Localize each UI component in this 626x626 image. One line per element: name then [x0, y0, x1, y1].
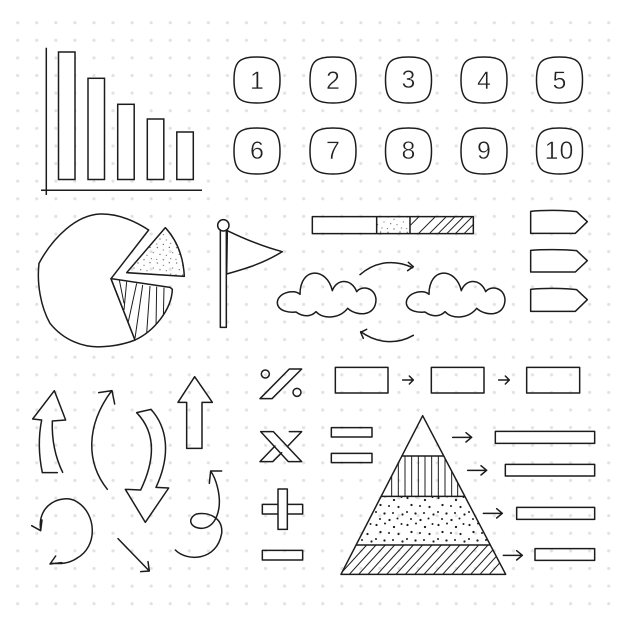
pyramid labels	[453, 431, 595, 560]
arrow: looped	[175, 471, 222, 557]
badge 9: 9	[477, 137, 491, 165]
pie dotted slice	[127, 228, 184, 276]
bottom arrow	[361, 329, 413, 342]
tag 1	[531, 210, 587, 233]
hand-drawn arrows	[32, 377, 222, 572]
pie main slice	[38, 214, 149, 347]
badge 4	[461, 57, 507, 103]
progress bar	[312, 217, 481, 234]
badge 5	[536, 57, 582, 103]
box 2	[431, 367, 484, 393]
vertical hatch band	[392, 456, 458, 496]
cloud right	[406, 273, 505, 317]
arrow: curved up outline	[33, 391, 66, 473]
badge 10	[536, 128, 582, 174]
arrow: straight up outline	[178, 377, 212, 448]
numbered badges	[234, 57, 582, 174]
badge 1	[234, 57, 280, 103]
plus symbol	[262, 489, 303, 529]
label 2	[468, 464, 595, 476]
badge 2: 2	[326, 67, 340, 95]
badge 1: 1	[250, 67, 264, 95]
badge 7	[310, 128, 356, 174]
flow boxes	[335, 367, 580, 393]
arrow: diagonal	[118, 539, 149, 572]
label 1	[453, 431, 595, 443]
arrow	[403, 376, 413, 384]
label 3	[483, 507, 595, 519]
tag 3	[531, 288, 587, 311]
math symbols	[260, 369, 372, 560]
badge 5: 5	[553, 67, 566, 95]
percent symbol	[260, 369, 302, 399]
badge 6	[234, 128, 280, 174]
badge 2	[310, 57, 356, 103]
badge 8	[386, 128, 432, 174]
arrow: thick curved down	[125, 409, 169, 522]
badge 7: 7	[326, 137, 340, 165]
tag 2	[531, 250, 587, 272]
badge 9	[461, 128, 507, 174]
arrow	[499, 376, 509, 384]
box 3	[527, 367, 580, 393]
badge 4: 4	[477, 67, 491, 95]
badge 3	[386, 57, 432, 103]
arrow tags	[531, 210, 587, 311]
badge 8: 8	[402, 137, 415, 165]
pyramid	[340, 416, 516, 574]
clouds with cycle arrows	[277, 262, 505, 342]
equals symbol	[331, 428, 372, 463]
badge 6: 6	[250, 137, 264, 165]
dotted band	[356, 496, 490, 545]
arrow: thin arc up	[92, 391, 115, 489]
badge 10: 10	[545, 137, 574, 165]
pie chart	[38, 214, 184, 347]
diagonal hatch band	[342, 546, 500, 574]
pie hatched slice	[111, 279, 172, 340]
top arrow	[360, 262, 413, 275]
badge 3: 3	[402, 66, 415, 94]
bar chart	[41, 48, 202, 195]
box 1	[335, 367, 388, 393]
cloud left	[277, 273, 376, 317]
multiply symbol	[260, 432, 302, 462]
minus symbol	[262, 550, 303, 560]
flag	[218, 220, 282, 327]
arrow: circular	[32, 499, 92, 564]
label 4	[503, 549, 595, 560]
